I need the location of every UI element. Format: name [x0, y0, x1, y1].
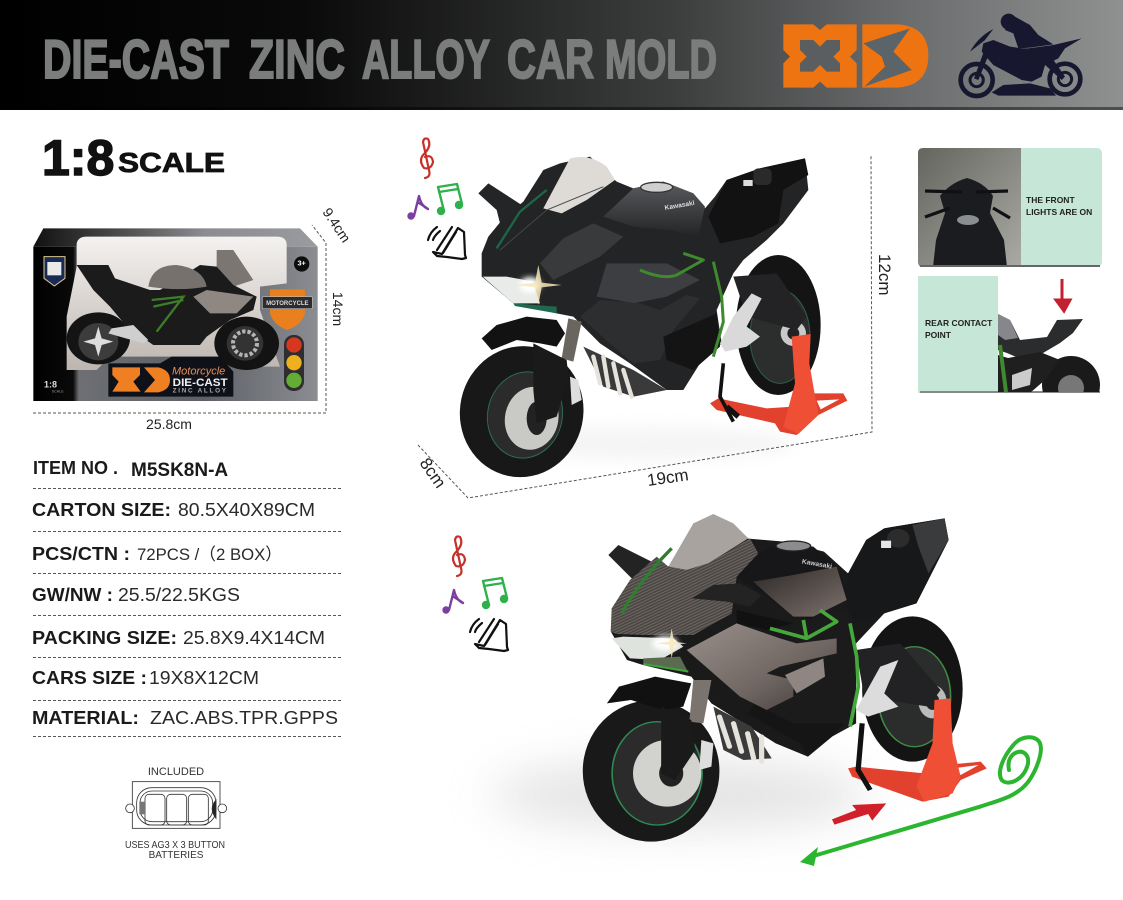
feature card: rear contact point: POINT — [925, 330, 952, 340]
fairing wing — [692, 583, 762, 607]
box brand label — [108, 357, 233, 397]
tank — [737, 543, 850, 620]
battery diagram: USES AG3 X 3 BUTTON — [125, 840, 225, 851]
seat and tail — [708, 158, 808, 243]
icon: XD logo — [783, 24, 928, 88]
specification list: PCS/CTN : — [32, 544, 130, 564]
icons: sound and music, top — [408, 138, 466, 259]
battery diagram — [125, 766, 227, 861]
specification list: 25.8X9.4X14CM — [183, 628, 325, 648]
icons: sound and music, bottom — [444, 536, 508, 651]
carbon fairing — [611, 538, 758, 635]
feature card: front lights — [918, 148, 1102, 267]
product box — [33, 228, 318, 401]
rear wheel — [862, 616, 963, 762]
specification list: ZAC.ABS.TPR.GPPS — [150, 708, 338, 728]
top motorcycle dimensions: 8cm — [416, 454, 450, 492]
box scale mark — [44, 380, 64, 394]
red stand — [710, 334, 847, 435]
front wheel — [583, 700, 719, 842]
icon: speaker — [428, 227, 466, 259]
photo motorcycle tail — [998, 314, 1100, 392]
green frame — [640, 253, 723, 357]
photo motorcycle front — [933, 178, 1007, 267]
swingarm — [733, 273, 807, 330]
engine and frame backing — [767, 610, 857, 723]
battery diagram: INCLUDED — [148, 766, 204, 778]
title: ZINC — [249, 28, 345, 90]
feature card: rear contact point: REAR CONTACT — [925, 318, 993, 328]
age badge — [294, 256, 309, 272]
box motorcycle — [67, 250, 279, 370]
specification list: PACKING SIZE: — [32, 628, 177, 648]
mirror — [478, 183, 522, 223]
side metal panel — [687, 623, 837, 710]
specification list: GW/NW : — [32, 585, 113, 605]
fender and fork — [607, 677, 713, 780]
body — [482, 157, 808, 390]
red arrow — [832, 803, 886, 825]
card caption: THE FRONT — [1026, 195, 1075, 205]
icon: purple note — [444, 590, 463, 612]
arrow down — [1056, 279, 1070, 311]
box dimensions: 25.8cm — [146, 416, 192, 432]
icon: speaker — [470, 619, 508, 651]
swingarm — [856, 643, 941, 707]
icon: treble clef — [453, 536, 465, 576]
top motorcycle photo — [448, 157, 847, 489]
windshield — [668, 514, 748, 570]
body silhouette — [611, 518, 949, 757]
specification list: ITEM NO . — [33, 458, 118, 478]
box brand label: Motorcycle — [172, 365, 225, 377]
specification list: 72PCS /（2 BOX） — [137, 545, 282, 564]
headlight — [483, 265, 562, 313]
floor shadow — [490, 760, 870, 830]
rear wheel — [736, 255, 821, 395]
box dimensions: 9.4cm — [320, 205, 354, 245]
title — [43, 28, 717, 90]
feature card: front lights: LIGHTS ARE ON — [1026, 207, 1092, 217]
carbon fairing panel — [540, 223, 623, 280]
box shield badge — [44, 257, 65, 286]
title: DIE-CAST — [43, 28, 229, 90]
box scale mark: SCALE — [52, 390, 64, 394]
top motorcycle dimensions — [416, 155, 894, 498]
headlight — [612, 628, 688, 673]
box scale mark: 1:8 — [44, 380, 57, 390]
icon: green notes — [483, 578, 507, 608]
specification list — [32, 458, 342, 736]
specification list: 25.5/22.5KGS — [118, 585, 240, 605]
front wheel — [448, 335, 596, 489]
box brand label: ZINC ALLOY — [173, 388, 227, 395]
scale heading: 1:8 — [42, 130, 114, 186]
box brand label: DIE-CAST — [173, 377, 228, 389]
traffic light — [284, 335, 304, 391]
scale heading: SCALE — [118, 147, 225, 178]
specification list: 80.5X40X89CM — [178, 500, 315, 520]
mirror — [608, 545, 655, 580]
icon: treble clef — [421, 138, 433, 178]
windshield — [543, 157, 615, 213]
seat and tail — [844, 518, 949, 623]
top motorcycle dimensions: 12cm — [875, 254, 894, 296]
specification list: CARTON SIZE: — [32, 500, 171, 520]
scale heading — [42, 130, 225, 186]
battery diagram: BATTERIES — [149, 850, 204, 861]
engine — [663, 313, 720, 370]
box dimensions: 14cm — [330, 292, 346, 326]
pipes backing — [713, 707, 772, 760]
icon: green notes — [438, 184, 462, 214]
box dimensions — [33, 205, 354, 432]
specification list: 19X8X12CM — [149, 668, 259, 688]
title: MOLD — [605, 28, 717, 90]
specification list: MATERIAL: — [32, 708, 139, 728]
motorcycle badge — [262, 289, 312, 330]
specification list: M5SK8N-A — [131, 460, 228, 481]
box window — [67, 237, 287, 370]
title: ALLOY — [362, 28, 490, 90]
exhaust pipes — [719, 717, 762, 762]
feature card: rear contact point — [918, 276, 1100, 393]
bottom motorcycle photo — [490, 514, 987, 842]
motorcycle badge: MOTORCYCLE — [266, 301, 309, 307]
green frame — [770, 610, 858, 727]
product box: 3+ — [297, 258, 306, 267]
white foot peg bracket — [720, 293, 762, 352]
tank — [603, 182, 705, 237]
red stand — [848, 698, 987, 802]
fender and fork — [482, 317, 565, 350]
specification list: CARS SIZE : — [32, 668, 147, 688]
mid panels — [597, 263, 700, 303]
upper bodywork — [608, 514, 858, 727]
upper bodywork: Kawasaki — [801, 558, 833, 571]
exhaust pipes — [593, 357, 632, 397]
header banner — [0, 0, 1123, 110]
pipes backing — [583, 347, 667, 397]
engine — [748, 653, 856, 757]
white foot peg bracket — [856, 660, 898, 717]
icon: motorcycle rider — [961, 14, 1082, 96]
top motorcycle photo: Kawasaki — [664, 200, 695, 212]
green arrow and spiral — [800, 737, 1041, 866]
icon: purple note — [408, 196, 428, 218]
title: CAR — [507, 28, 594, 90]
top motorcycle dimensions: 19cm — [646, 465, 690, 490]
